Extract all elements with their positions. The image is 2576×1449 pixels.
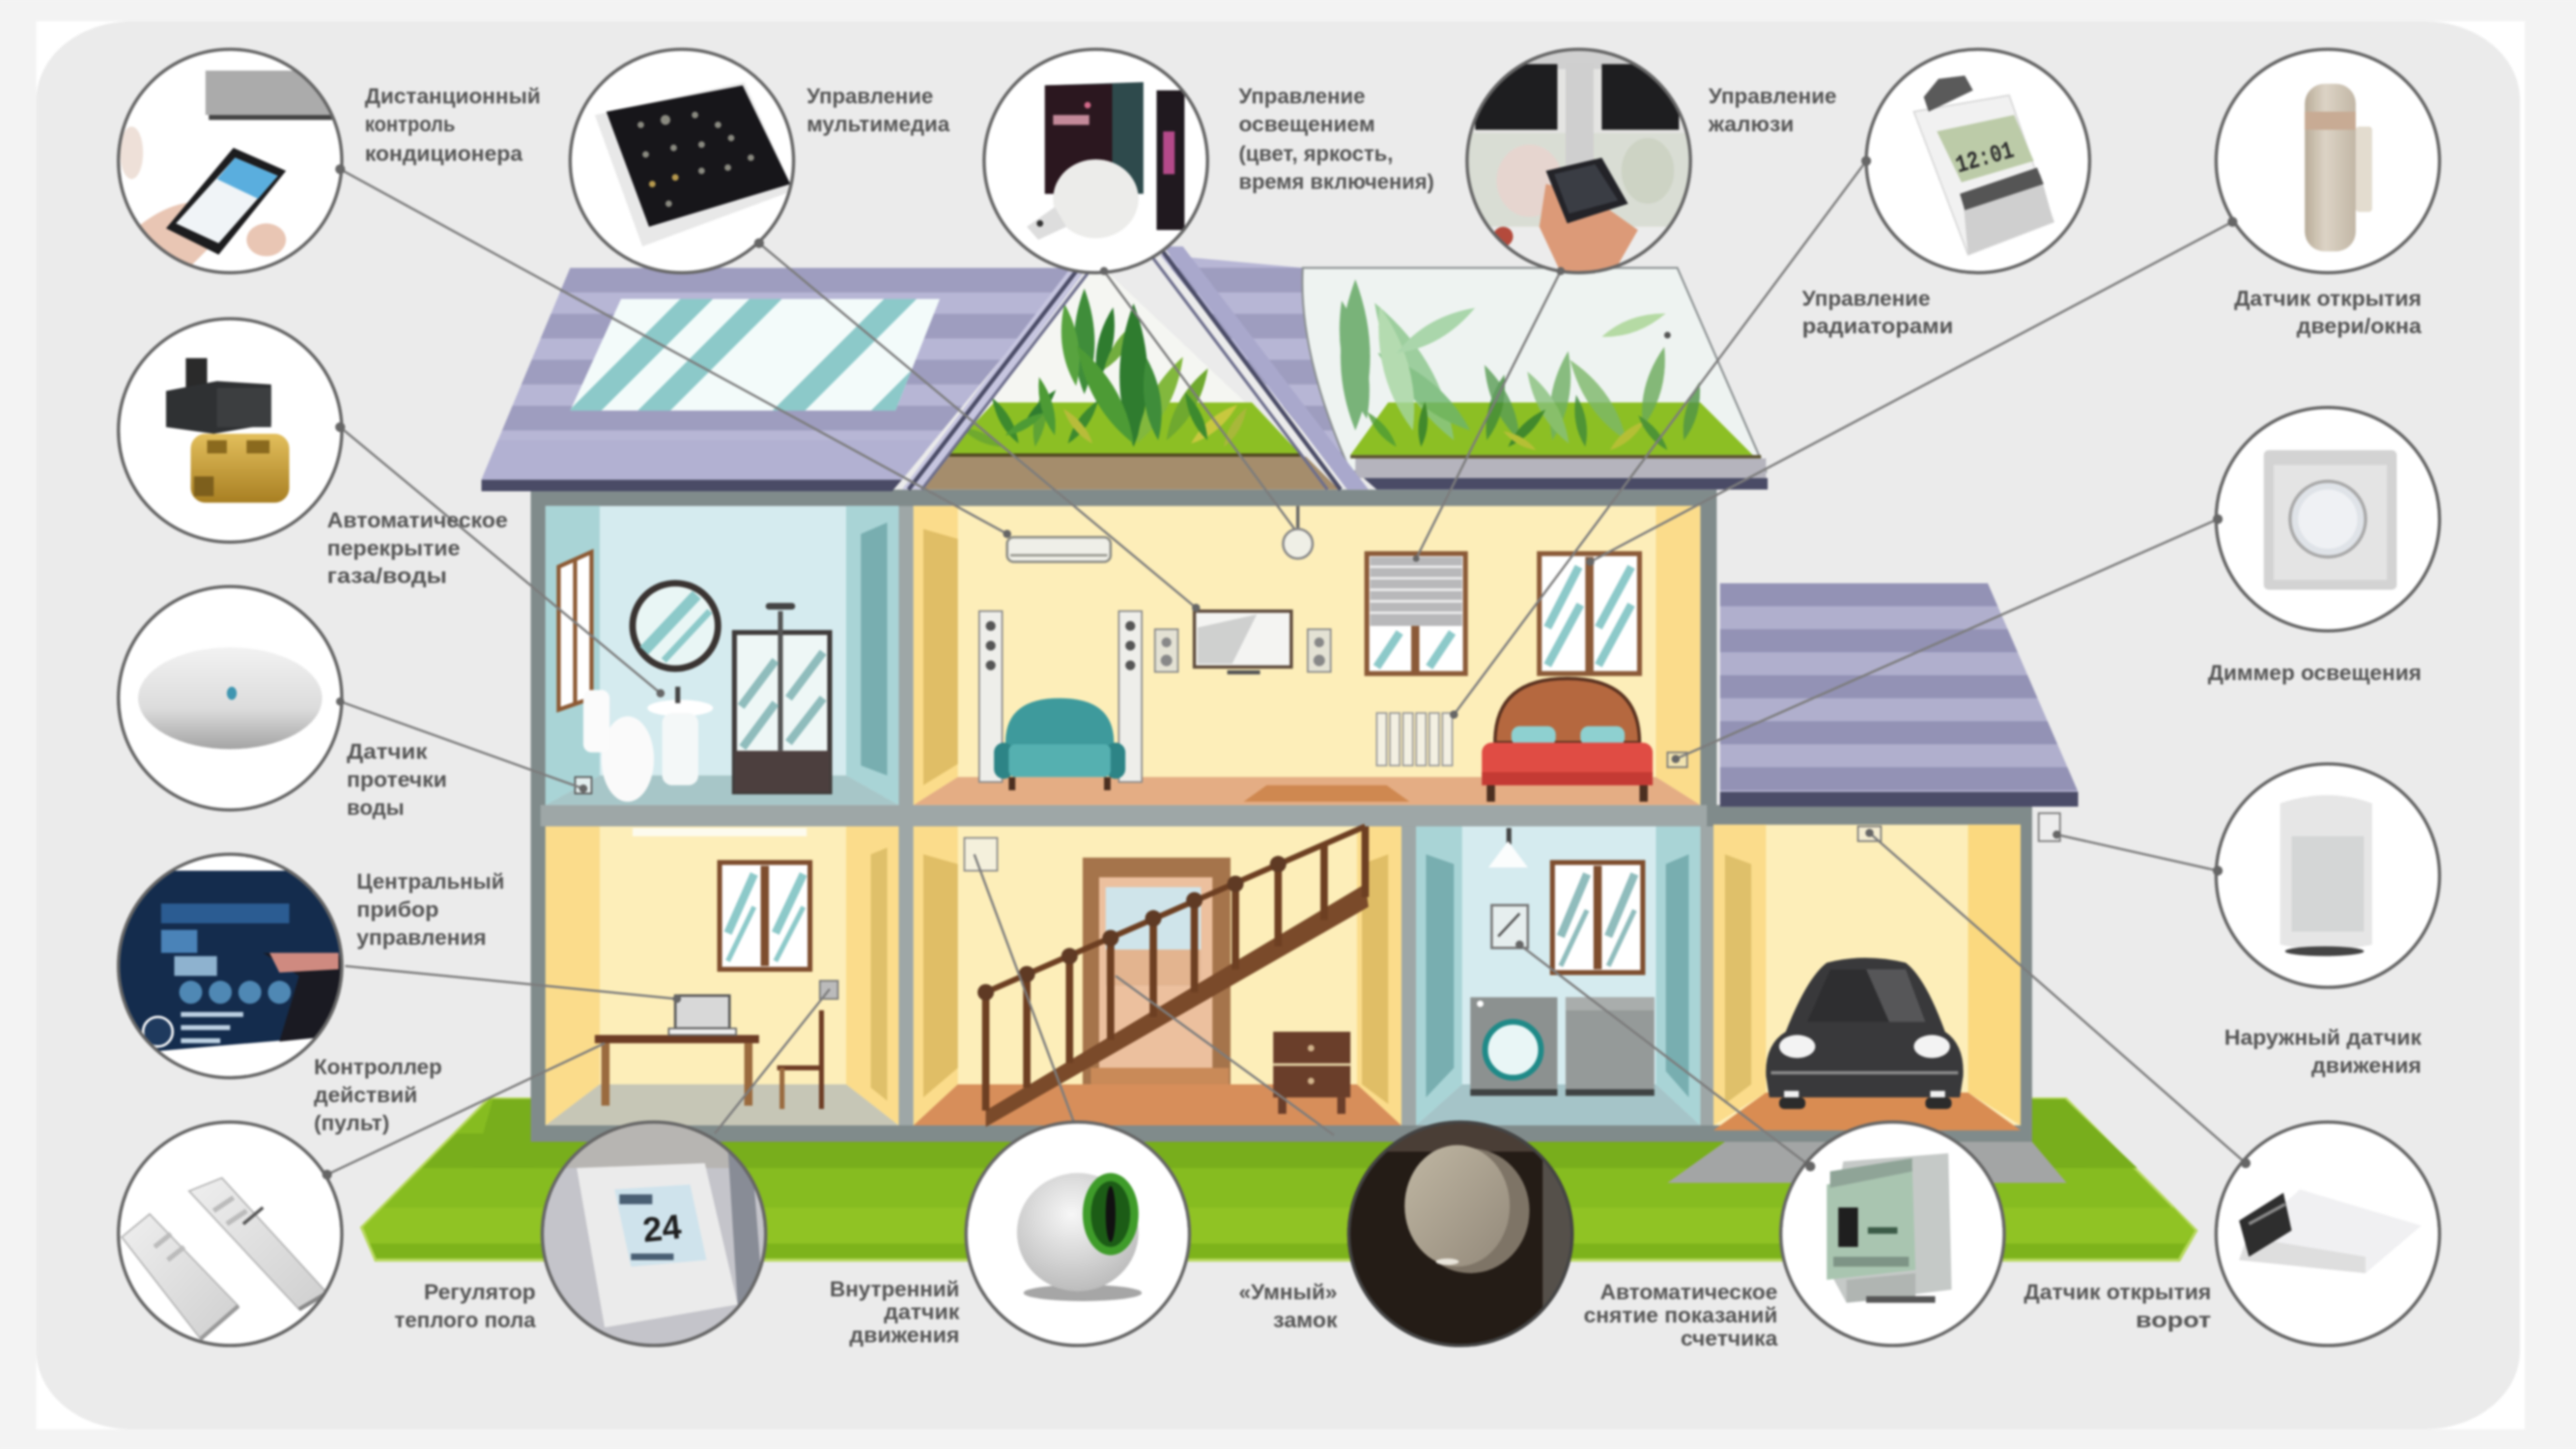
- label: lighting control: Управление: [1238, 84, 1365, 108]
- dresser: [1273, 1032, 1350, 1114]
- label: gas and water shutoff: газа/воды: [327, 564, 447, 588]
- staircase: [977, 826, 1369, 1127]
- label: air conditioner control: Дистанционный: [365, 84, 541, 108]
- laundry window: [1552, 863, 1643, 973]
- label: automatic meter reading: [1584, 1280, 1778, 1350]
- television: [1195, 611, 1291, 674]
- roof edge arrow: [1664, 332, 1671, 338]
- label: smart lock: «Умный»: [1238, 1280, 1338, 1304]
- circle: air conditioner remote control: [119, 49, 342, 276]
- label: radiator control: [1802, 286, 1953, 338]
- label: multimedia control: Управление: [807, 84, 933, 108]
- circle: radiator thermostat head: 12:01: [1953, 137, 2017, 180]
- label: indoor motion sensor: движения: [849, 1322, 959, 1347]
- right purple roof section: [1160, 255, 1364, 490]
- circle: floor heating regulator: 24: [640, 1208, 683, 1250]
- label: door and window sensor: Датчик открытия: [2234, 286, 2421, 310]
- label: automatic meter reading: снятие показаний: [1584, 1303, 1777, 1327]
- label: outdoor motion sensor: движения: [2311, 1054, 2421, 1078]
- label: automatic meter reading: Автоматическое: [1600, 1280, 1777, 1304]
- bathroom window: [558, 552, 591, 710]
- label: outdoor motion sensor: [2224, 1026, 2422, 1078]
- room: laundry: [1416, 826, 1700, 1125]
- room: bathroom: [546, 506, 898, 805]
- label: multimedia control: мультимедиа: [807, 112, 950, 136]
- label: light dimmer: Диммер освещения: [2208, 661, 2421, 685]
- circle: light dimmer: [2216, 408, 2440, 631]
- label: gas and water shutoff: перекрытие: [327, 536, 460, 560]
- central gable: [902, 243, 1369, 490]
- label: floor heating regulator: теплого пола: [394, 1308, 536, 1332]
- circle: gate sensor: [2216, 1122, 2440, 1346]
- circle: automatic meter reader: [1781, 1122, 2004, 1346]
- label: central control unit: [356, 869, 504, 950]
- circle: radiator thermostat head: [1866, 49, 2089, 272]
- label: automatic meter reading: счетчика: [1681, 1326, 1778, 1350]
- circle: central control unit: [115, 854, 345, 1078]
- label: water leak sensor: [347, 740, 447, 820]
- label: indoor motion sensor: датчик: [884, 1300, 960, 1324]
- skylight: [570, 298, 941, 412]
- label: air conditioner control: [365, 84, 541, 166]
- door: [1083, 858, 1231, 1084]
- driveway: [1667, 1142, 2067, 1182]
- glass plants: [1330, 279, 1705, 454]
- gable plants: [959, 289, 1251, 451]
- sofa: [994, 698, 1125, 790]
- garage roof: [1720, 583, 2079, 807]
- bed: [1482, 678, 1653, 802]
- label: multimedia control: [807, 84, 950, 136]
- label: door and window sensor: двери/окна: [2297, 314, 2422, 338]
- ceiling lamp: [1283, 506, 1313, 558]
- label: action controller: действий: [314, 1083, 417, 1107]
- house: [481, 243, 2079, 1142]
- room: living and bedroom: [914, 506, 1700, 805]
- room: study: [546, 826, 898, 1125]
- main wall structure: [530, 490, 1716, 1142]
- mirror: [633, 583, 718, 668]
- garage wall: [1709, 805, 2032, 1142]
- label: central control unit: Центральный: [356, 869, 504, 894]
- gable bars: [902, 243, 1369, 490]
- label: central control unit: управления: [356, 925, 487, 950]
- interior slabs and partitions: [541, 506, 1713, 1125]
- circle: outdoor motion sensor: [2216, 764, 2440, 987]
- circle: door sensor: [2216, 49, 2440, 272]
- label: water leak sensor: Датчик: [347, 740, 428, 764]
- lawn: [360, 1097, 2198, 1262]
- label: lighting control: [1238, 84, 1434, 194]
- left main roof: [481, 268, 1076, 492]
- label: action controller: (пульт): [314, 1111, 389, 1135]
- label: gas and water shutoff: Автоматическое: [327, 508, 508, 532]
- connector dots: [323, 156, 2250, 1179]
- gate sensor marker: [1858, 826, 1881, 841]
- circle: remote controller: [119, 1122, 342, 1346]
- label: radiator control: радиаторами: [1802, 314, 1953, 338]
- label: outdoor motion sensor: Наружный датчик: [2224, 1026, 2422, 1050]
- label: lighting control: (цвет, яркость,: [1238, 142, 1393, 166]
- label: smart lock: замок: [1273, 1308, 1338, 1332]
- label: action controller: [314, 1055, 442, 1135]
- motion marker: [964, 838, 997, 870]
- circle: lighting bulb: [984, 49, 1207, 272]
- label: water leak sensor: воды: [347, 796, 405, 820]
- circle: water leak sensor: [119, 586, 342, 810]
- radiator: [1376, 713, 1453, 766]
- label: indoor motion sensor: [830, 1277, 960, 1347]
- tall speakers: [979, 611, 1142, 782]
- label: gas and water shutoff: [327, 508, 508, 588]
- label: indoor motion sensor: Внутренний: [830, 1277, 959, 1301]
- shower: [734, 603, 830, 792]
- rug: [1244, 785, 1409, 802]
- label: lighting control: освещением: [1238, 112, 1375, 136]
- label: door and window sensor: [2234, 286, 2422, 338]
- toilet and sink: [583, 687, 713, 802]
- label: central control unit: прибор: [356, 897, 439, 922]
- label: gate sensor: ворот: [2136, 1308, 2211, 1332]
- circle: smart lock: [1348, 1122, 1572, 1346]
- dimmer marker: [1667, 753, 1687, 767]
- label: action controller: Контроллер: [314, 1055, 442, 1079]
- circle: blinds control: [1467, 49, 1690, 276]
- meter panel: [1491, 905, 1528, 948]
- label: air conditioner control: кондиционера: [365, 142, 524, 166]
- circle: multimedia panel: [570, 49, 794, 272]
- label: lighting control: время включения): [1238, 170, 1434, 194]
- label: blinds control: жалюзи: [1708, 112, 1794, 136]
- dryer: [1566, 997, 1655, 1095]
- chair: [778, 1010, 822, 1109]
- label: smart lock: [1238, 1280, 1338, 1332]
- thermostat marker: [820, 980, 838, 999]
- label: floor heating regulator: Регулятор: [424, 1280, 536, 1304]
- room: hallway with stairs: [914, 826, 1401, 1127]
- bedroom window: [1540, 554, 1639, 673]
- outdoor motion marker: [2039, 813, 2060, 841]
- leader lines: [327, 161, 2246, 1175]
- air conditioner: [1007, 537, 1111, 562]
- label: air conditioner control: контроль: [365, 112, 455, 136]
- desk: [595, 1035, 759, 1106]
- label: radiator control: Управление: [1802, 286, 1930, 310]
- label: gate sensor: [2024, 1280, 2211, 1332]
- laptop: [668, 996, 736, 1035]
- leak sensor marker: [575, 777, 591, 793]
- small speakers: [1155, 629, 1331, 672]
- laundry lamp: [1488, 828, 1528, 867]
- blinds window: [1367, 554, 1465, 673]
- circle: indoor motion sensor: [966, 1122, 1189, 1346]
- label: blinds control: [1708, 84, 1837, 136]
- label: water leak sensor: протечки: [347, 768, 447, 792]
- study window: [720, 863, 810, 969]
- label: gate sensor: Датчик открытия: [2024, 1280, 2211, 1304]
- washing machine: [1470, 997, 1557, 1095]
- circle: floor heating regulator: [542, 1122, 766, 1346]
- label: floor heating regulator: [394, 1280, 536, 1332]
- circle: gas and water shutoff valve: [119, 319, 342, 542]
- label: blinds control: Управление: [1709, 84, 1837, 108]
- glass roof with plants: [1302, 268, 1768, 490]
- car: [1766, 957, 1964, 1109]
